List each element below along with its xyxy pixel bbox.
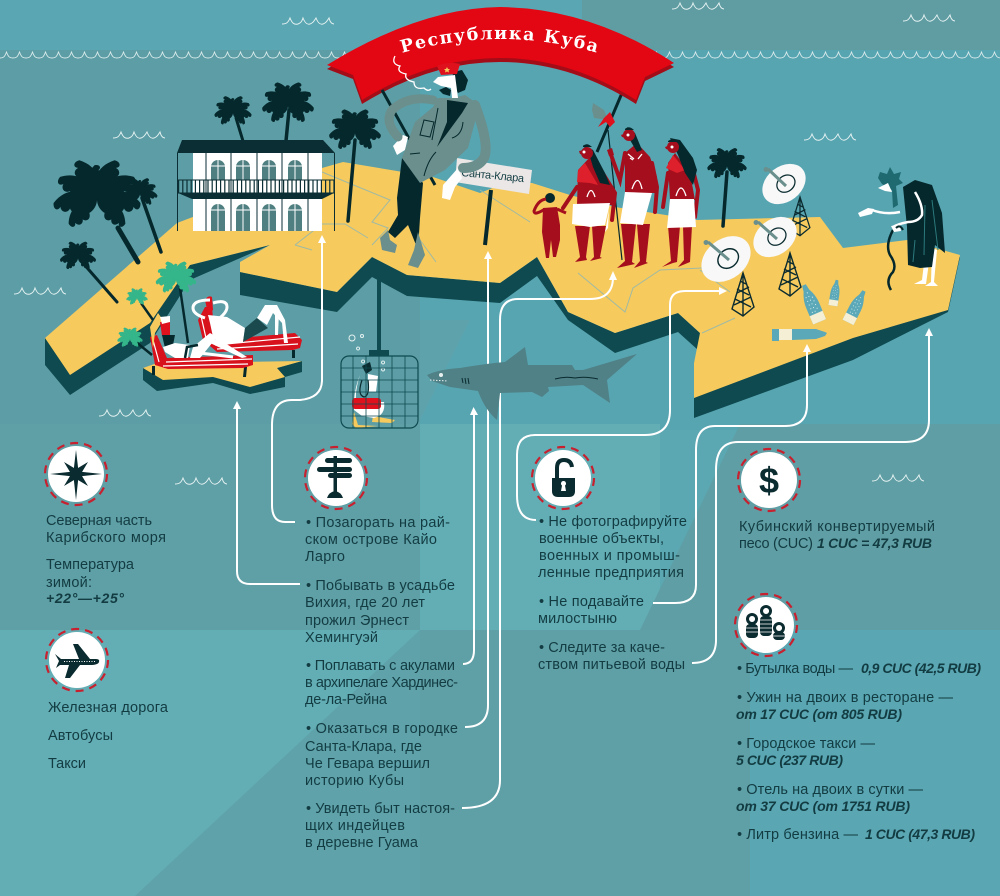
text: things to do: • Позагорать на рай- (306, 515, 450, 531)
water bottles (772, 279, 869, 341)
text: currency: песо (CUC) (739, 536, 813, 552)
text: warnings: милостыню (538, 611, 617, 627)
text: things to do: историю Кубы (305, 773, 404, 789)
title text: Республика Куба (400, 26, 597, 53)
arrows (233, 235, 933, 808)
text: currency: 1 CUC = 47,3 RUB (817, 535, 932, 551)
icon: compass (45, 443, 107, 505)
text: prices (736, 660, 981, 843)
text: things to do (305, 515, 458, 851)
icon: plane (46, 629, 108, 691)
text: prices: • Ужин на двоих в ресторане — (737, 690, 954, 706)
text: things to do: Вихия, где 20 лет (305, 595, 425, 611)
small island (143, 361, 302, 394)
text: things to do: • Побывать в усадьбе (306, 578, 455, 594)
title banner (327, 7, 674, 104)
text: things to do: в архипелаге Хардинес- (305, 675, 458, 691)
text: warnings: • Не фотографируйте (539, 514, 687, 530)
text: transport: Железная дорога (48, 700, 169, 716)
text: currency: Кубинский конвертируемый (739, 519, 935, 535)
cable and shark cage with diver (341, 275, 418, 428)
wave row (0, 51, 1000, 61)
text: prices: от 17 CUC (от 805 RUB) (736, 706, 902, 722)
front lounger (150, 335, 253, 377)
island shadow (45, 245, 960, 418)
satellite dishes (692, 156, 814, 316)
text: things to do: • Увидеть быт настоя- (306, 801, 455, 817)
text: warnings: ленные предприятия (538, 565, 684, 581)
text: prices: • Бутылка воды — (737, 661, 854, 677)
house: Hemingway estate (177, 140, 335, 231)
right flag pole (597, 93, 622, 152)
sign: Santa Clara (455, 158, 532, 245)
palm trees: dark (52, 80, 747, 302)
indian middle (607, 127, 657, 268)
text: warnings (538, 514, 687, 673)
green palms (117, 259, 197, 355)
sign: Santa Clara: Санта-Клара (461, 167, 525, 185)
text: things to do: щих индейцев (305, 818, 405, 834)
text: things to do: в деревне Гуама (305, 835, 419, 851)
icon: open lock (532, 447, 594, 509)
text: location and climate: Температура (46, 557, 135, 573)
icon: coins (735, 594, 797, 656)
text: warnings: • Не подавайте (539, 594, 644, 610)
text: things to do: ском острове Кайо (305, 532, 437, 548)
small waves (14, 3, 955, 484)
text: prices: • Городское такси — (737, 736, 876, 752)
Che Guevara figure (380, 56, 486, 268)
indians group (534, 103, 698, 268)
indian left (563, 144, 615, 262)
text: location and climate: зимой: (46, 575, 92, 591)
text: location and climate (46, 513, 166, 606)
icon: dollar (738, 449, 800, 511)
road lines (295, 172, 735, 333)
text: things to do: • Оказаться в городке (306, 721, 458, 737)
icon: signpost (305, 447, 367, 509)
text: prices: 1 CUC (47,3 RUB) (865, 826, 975, 842)
text: warnings: военные объекты, (539, 531, 664, 547)
main island (45, 162, 960, 398)
text: prices: 0,9 CUC (42,5 RUB) (861, 660, 981, 676)
text: prices: 5 CUC (237 RUB) (736, 752, 843, 768)
back lounger (198, 307, 302, 358)
text: location and climate: Карибского моря (46, 530, 166, 546)
text: currency (739, 519, 935, 552)
shark (427, 347, 637, 420)
sunbathers on loungers (150, 296, 302, 377)
text: things to do: Ларго (305, 549, 345, 565)
indian right (662, 138, 698, 267)
text: prices: • Литр бензина — (737, 827, 858, 843)
text: transport: Такси (48, 756, 86, 772)
text: things to do: • Поплавать с акулами (306, 658, 455, 674)
text: prices: от 37 CUC (от 1751 RUB) (736, 798, 910, 814)
text: things to do: Че Гевара вершил (305, 756, 430, 772)
old beggar figure (858, 167, 945, 290)
text: warnings: военных и промыш- (539, 548, 680, 564)
text: warnings: ством питьевой воды (538, 657, 685, 673)
text: location and climate: Северная часть (46, 513, 152, 529)
text: prices: • Отель на двоих в сутки — (737, 782, 924, 798)
text: things to do: Санта-Клара, где (305, 739, 422, 755)
woman blonde (150, 313, 247, 358)
text: transport: Автобусы (48, 728, 113, 744)
text: warnings: • Следите за каче- (539, 640, 665, 656)
icon: dollar: $ (759, 460, 779, 501)
text: things to do: Хемингуэй (305, 630, 378, 646)
text: location and climate: +22°—+25° (46, 590, 124, 606)
text: things to do: де-ла-Рейна (305, 692, 388, 708)
woman with red hair (193, 296, 288, 345)
text: transport (48, 700, 169, 772)
text: things to do: прожил Эрнест (305, 613, 409, 629)
child (534, 193, 566, 258)
